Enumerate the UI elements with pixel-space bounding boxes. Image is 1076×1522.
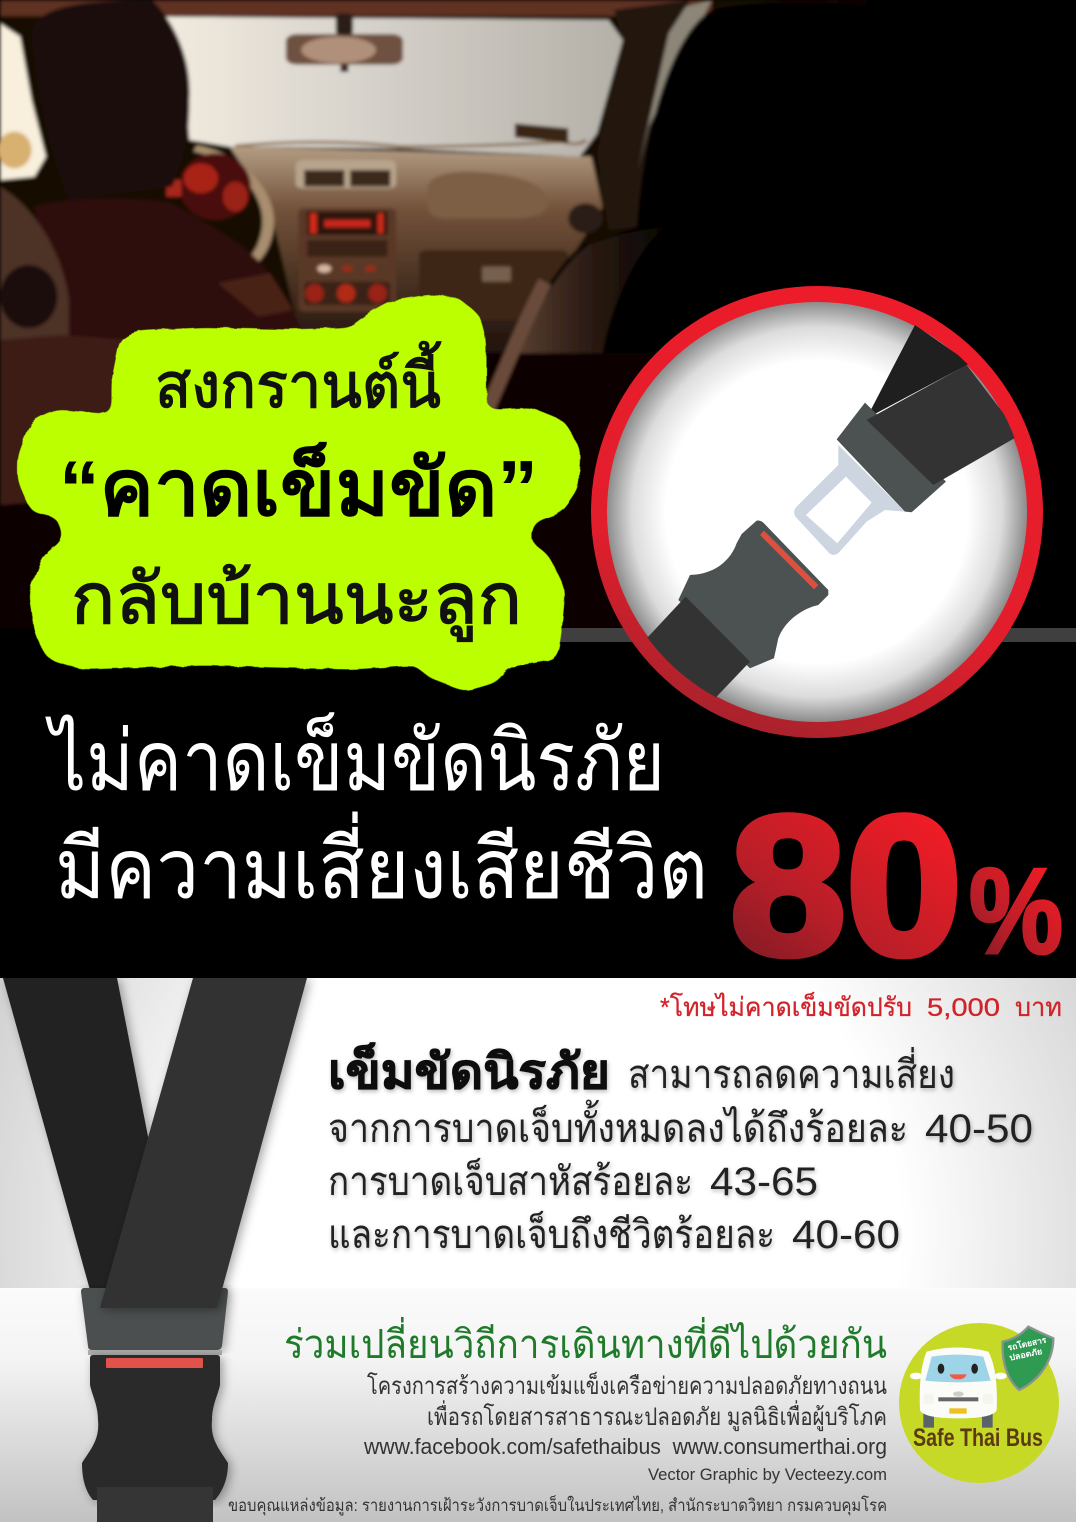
text block: seatbelt benefits bbox=[328, 1042, 1033, 1257]
text block: seatbelt benefits: การบาดเจ็บสาหัสร้อยละ bbox=[328, 1157, 693, 1204]
fine notice: 5,000 bbox=[927, 994, 1000, 1022]
buckle body bbox=[82, 1355, 228, 1500]
headline: risk of death: มีความเสี่ยงเสียชีวิต bbox=[55, 811, 708, 916]
tongue plate bbox=[81, 1288, 228, 1350]
text block: seatbelt benefits: จากการบาดเจ็บทั้งหมดลงได้ถึงร้อยละ bbox=[328, 1099, 908, 1151]
statistic: 80%: 80 bbox=[730, 775, 962, 996]
fine notice: *โทษไม่คาดเข็มขัดปรับ bbox=[660, 991, 912, 1022]
text block: seatbelt benefits: สามารถลดความเสี่ยง bbox=[628, 1047, 955, 1097]
disc bbox=[607, 302, 1027, 722]
bus bbox=[910, 1347, 1007, 1428]
strap left bbox=[3, 978, 178, 1290]
slogan line 2: “คาดเข็มขัด” bbox=[59, 442, 538, 532]
shield badge: รถโดยสาร bbox=[1007, 1335, 1048, 1353]
text block: project credits bbox=[228, 1371, 887, 1516]
statistic: 80%: % bbox=[969, 843, 1063, 979]
strap right bbox=[100, 978, 307, 1308]
photo: car interior with driver bbox=[0, 0, 885, 628]
text block: project credits: โครงการสร้างความเข้มแข็งเครือข่ายความปลอดภัยทางถนน bbox=[367, 1371, 887, 1400]
icon: seatbelt buckle in red circle bbox=[591, 286, 1043, 738]
text block: project credits: www.facebook.com/safethaibus www.consumerthai.org bbox=[363, 1434, 887, 1459]
text block: seatbelt benefits: 40-50 bbox=[925, 1107, 1033, 1151]
text block: seatbelt benefits: 43-65 bbox=[710, 1160, 818, 1204]
belt parts bbox=[640, 325, 1020, 713]
logo: Safe Thai Bus bbox=[899, 1323, 1059, 1483]
ring bbox=[591, 286, 1043, 738]
callout: lime green blob with slogan bbox=[20, 297, 578, 689]
text block: seatbelt benefits: เข็มขัดนิรภัย bbox=[328, 1042, 610, 1099]
silver gap bbox=[88, 1350, 222, 1355]
grey horizontal band bbox=[555, 628, 1076, 642]
text block: project credits: เพื่อรถโดยสารสาธารณะปลอดภัย มูลนิธิเพื่อผู้บริโภค bbox=[427, 1400, 887, 1432]
headline: not wearing seatbelt: ไม่คาดเข็มขัดนิรภัย bbox=[45, 712, 665, 808]
shield badge bbox=[1003, 1327, 1053, 1390]
slogan line 3: กลับบ้านนะลูก bbox=[71, 560, 522, 642]
statistic: 80% bbox=[730, 775, 1063, 996]
text block: project credits: Vector Graphic by Vecteezy.com bbox=[648, 1465, 887, 1484]
logo text: Safe Thai Bus bbox=[913, 1424, 1043, 1452]
strap bottom bbox=[97, 1487, 213, 1522]
fine notice: บาท bbox=[1015, 992, 1062, 1022]
buckle red button bbox=[106, 1358, 203, 1368]
text block: project credits: ขอบคุณแหล่งข้อมูล: รายงานการเฝ้าระวังการบาดเจ็บในประเทศไทย, สำนักระบาดวิทยา กรมควบคุมโรค bbox=[228, 1494, 887, 1516]
black background panel bbox=[0, 0, 1076, 980]
illustration: seatbelt straps and buckle bbox=[3, 978, 307, 1522]
fine notice bbox=[660, 991, 1062, 1022]
shield badge: ปลอดภัย bbox=[1008, 1346, 1043, 1363]
text block: seatbelt benefits: 40-60 bbox=[792, 1213, 900, 1257]
heading: campaign slogan: ร่วมเปลี่ยนวิถีการเดินทางที่ดีไปด้วยกัน bbox=[284, 1317, 887, 1367]
text block: seatbelt benefits: และการบาดเจ็บถึงชีวิตร้อยละ bbox=[328, 1210, 775, 1257]
lower panel background bbox=[0, 978, 1076, 1522]
slogan line 1: สงกรานต์นี้ bbox=[155, 341, 442, 421]
